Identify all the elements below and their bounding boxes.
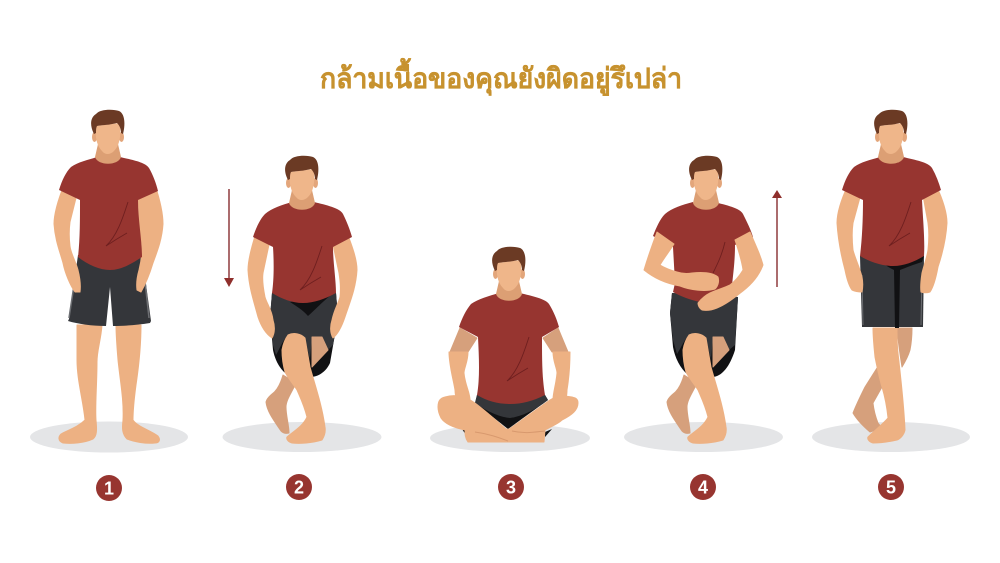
legs 3 [438, 396, 578, 442]
legs 1 [59, 325, 159, 443]
shorts 2 [270, 293, 338, 377]
legs 4 [667, 334, 729, 443]
shorts 1 [68, 255, 151, 326]
shirt 5 [842, 157, 941, 266]
shadow 5 [812, 422, 970, 452]
shirt 3 [459, 293, 559, 404]
shadow 2 [222, 422, 382, 452]
shorts 3 [462, 395, 552, 437]
figure 5: finishing stand [812, 110, 970, 452]
badge 2 [286, 474, 312, 500]
badge 4: 4 [698, 478, 708, 498]
legs 2 [266, 334, 328, 443]
badge 5: 5 [886, 478, 896, 498]
shorts 5 [860, 256, 924, 328]
head 1 [91, 110, 124, 164]
head 2 [285, 156, 318, 210]
shorts 4 [670, 293, 738, 377]
badge 3: 3 [506, 478, 516, 498]
figure 1: standing [30, 110, 188, 453]
head 3 [492, 247, 525, 301]
shadow 4 [624, 422, 783, 452]
arms 5 [837, 185, 947, 293]
title: กล้ามเนื้อของคุณยังผิดอยู่รึเปล่า [320, 57, 682, 96]
arms 1 [54, 185, 163, 292]
legs 5 [853, 328, 912, 443]
shadow 1 [30, 422, 188, 452]
arms 3 [449, 328, 570, 417]
shirt 4 [653, 202, 753, 302]
head 4 [689, 156, 722, 210]
shirt 1 [59, 157, 158, 270]
arms 4 [644, 232, 763, 310]
badge 4 [690, 474, 716, 500]
arrow up [772, 190, 782, 287]
figure 3: sitting cross-legged [430, 247, 590, 452]
badge 5 [878, 474, 904, 500]
badge 1 [96, 475, 122, 501]
shirt wrinkle 4 [713, 242, 725, 273]
badge 2: 2 [294, 478, 304, 498]
head 5 [874, 110, 907, 164]
arms 2 [248, 230, 357, 338]
figure 4: rising [624, 156, 783, 452]
shadow 3 [430, 424, 590, 452]
arrow down [224, 189, 234, 287]
shirt 2 [253, 202, 352, 303]
figure 2: lowering [222, 156, 382, 452]
badge 3 [498, 474, 524, 500]
badge 1: 1 [104, 478, 114, 498]
